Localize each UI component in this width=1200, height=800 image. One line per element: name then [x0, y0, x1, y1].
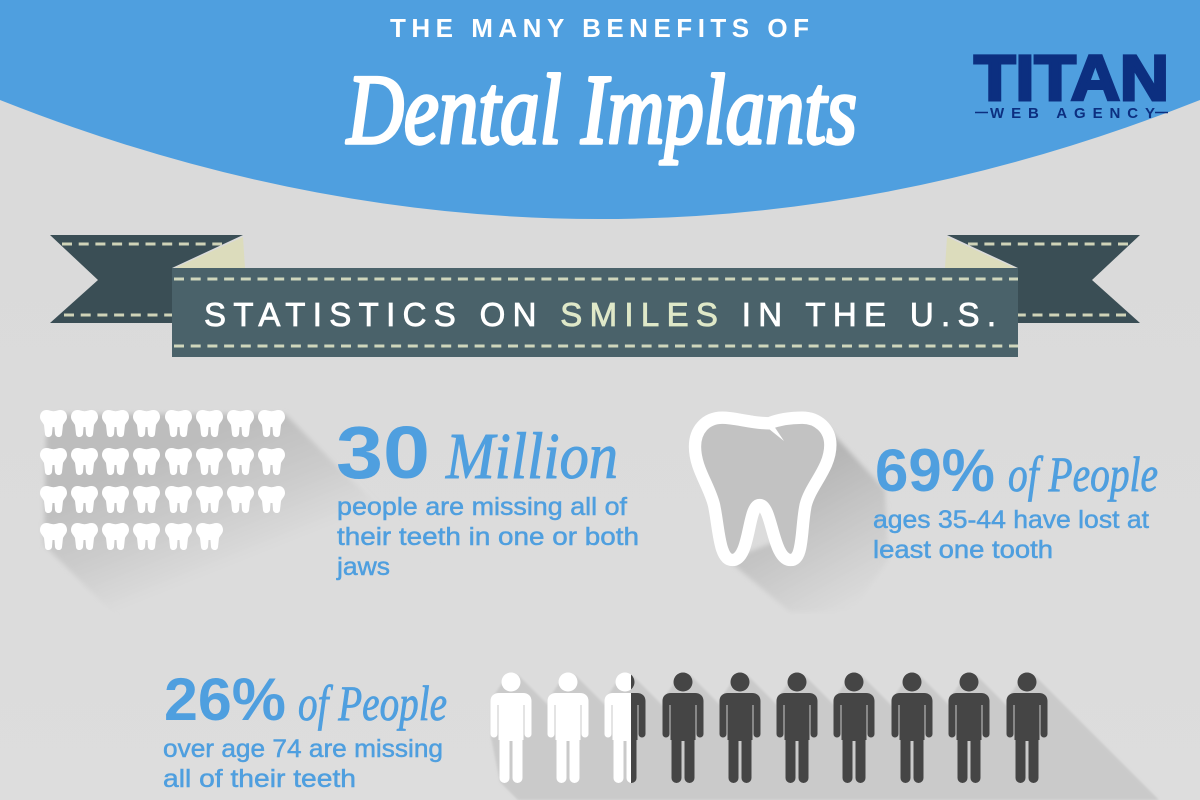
- stat: 26% of people: all of their teeth: [163, 765, 356, 793]
- icon row: people, 2.6 of 10 white: [490, 672, 1048, 783]
- title: dental implants: Dental Implants: [345, 54, 857, 165]
- stat: 69% of people: least one tooth: [873, 536, 1053, 564]
- stat: 26% of people: 26%: [164, 666, 286, 733]
- white people: [490, 672, 588, 783]
- stat: 69% of people: ages 35-44 have lost at: [873, 506, 1149, 534]
- icon: large tooth outline: [695, 416, 830, 560]
- stat: 69% of people: 69%: [875, 437, 995, 504]
- long shadow: people row: [491, 675, 1159, 800]
- stat: 30 million: [336, 411, 639, 581]
- dark people: [662, 672, 1048, 783]
- long shadow: teeth grid: [44, 414, 430, 630]
- ribbon main band: [172, 268, 1018, 357]
- logo: titan web agency: WEB AGENCY: [990, 105, 1155, 122]
- stat: 26% of people: [163, 666, 447, 793]
- header dome: [0, 0, 1200, 219]
- stat: 30 million: people are missing all of: [337, 493, 627, 521]
- stat: 26% of people: over age 74 are missing: [163, 735, 443, 763]
- stat: 30 million: 30: [336, 411, 430, 494]
- stat: 30 million: their teeth in one or both: [337, 523, 639, 551]
- icon grid: 30 teeth: [40, 410, 285, 550]
- ribbon right tail: [945, 235, 1140, 323]
- stat: 30 million: Million: [445, 420, 618, 493]
- stat: 26% of people: of People: [298, 675, 447, 731]
- logo: titan web agency: TITAN: [974, 42, 1169, 114]
- stat: 69% of people: [873, 437, 1158, 564]
- title: the many benefits of: THE MANY BENEFITS OF: [390, 13, 809, 43]
- stat: 30 million: jaws: [336, 553, 390, 581]
- ribbon heading: STATISTICS ON SMILES IN THE U.S.: [204, 296, 996, 333]
- ribbon left tail: [50, 235, 245, 323]
- long shadow: large tooth: [728, 425, 888, 612]
- ribbon banner: [50, 235, 1140, 357]
- stat: 69% of people: of People: [1008, 446, 1158, 502]
- half white person: [604, 672, 646, 783]
